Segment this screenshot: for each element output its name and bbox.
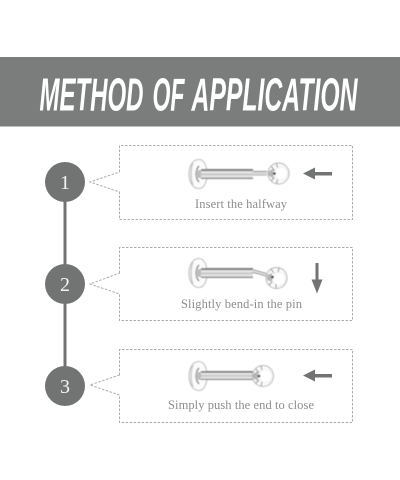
caption 1: Insert the halfway bbox=[195, 197, 288, 211]
caption 2: Slightly bend-in the pin bbox=[181, 297, 303, 311]
step 2 bbox=[45, 248, 352, 320]
title bbox=[40, 68, 358, 120]
step 3 bbox=[45, 350, 352, 422]
number badge 2 bbox=[45, 264, 85, 304]
number badge 3: 3 bbox=[60, 376, 70, 398]
title: OF bbox=[152, 68, 185, 120]
number badge 3 bbox=[45, 366, 85, 406]
caption 3: Simply push the end to close bbox=[168, 398, 314, 412]
number badge 2: 2 bbox=[60, 274, 70, 296]
timeline connector bbox=[64, 182, 66, 386]
title: METHOD bbox=[40, 68, 144, 120]
callout box 2 bbox=[90, 248, 352, 320]
arrow pointing down bbox=[312, 263, 322, 294]
arrow pointing left 1 bbox=[303, 168, 332, 180]
pin illustration 1 bbox=[189, 160, 289, 188]
number badge 1 bbox=[45, 162, 85, 202]
callout box 1 bbox=[90, 146, 352, 220]
pin illustration 3 bbox=[189, 362, 274, 390]
number badge 1: 1 bbox=[60, 172, 70, 194]
title banner bbox=[0, 57, 400, 126]
pin illustration 2 bbox=[189, 258, 287, 288]
step 1 bbox=[45, 146, 352, 220]
arrow pointing left 3 bbox=[303, 370, 332, 382]
callout box 3 bbox=[90, 350, 352, 422]
